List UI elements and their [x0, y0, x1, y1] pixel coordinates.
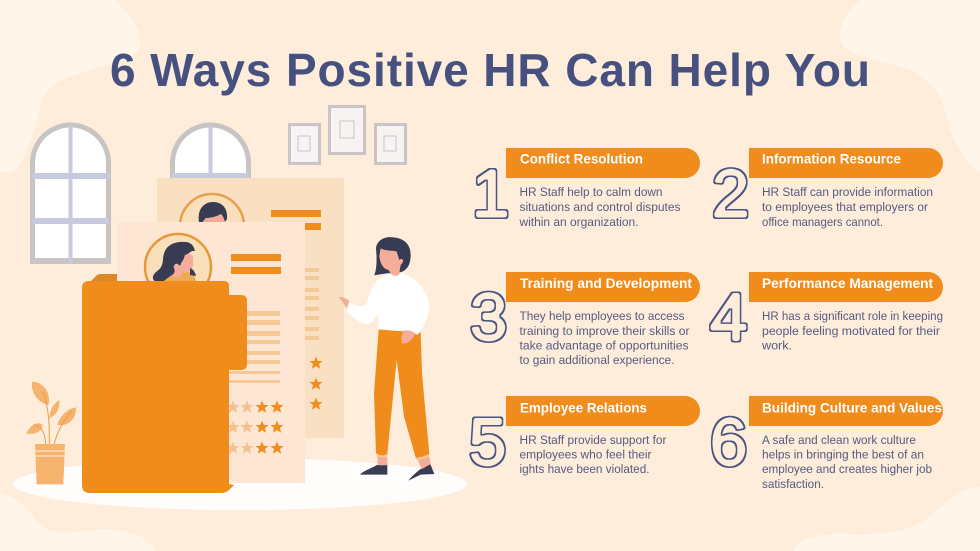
card 1: Conflict Resolution: within an organization.: [519, 215, 638, 229]
back resume: [157, 178, 344, 438]
illustration: office scene: [13, 106, 467, 510]
card 4: Performance Management: people feeling motivated for their: [762, 324, 940, 338]
card 5: Employee Relations: Employee Relations: [520, 400, 647, 416]
plant: [26, 382, 76, 484]
woman: [338, 237, 434, 481]
card 3: Training and Development: They help employees to access: [520, 309, 684, 323]
card 1: Conflict Resolution: Conflict Resolution: [520, 150, 643, 166]
card 3: Training and Development: take advantage of opportunities: [520, 338, 688, 352]
card 5: Employee Relations: 5: [469, 405, 506, 480]
card 6: Building Culture and Values: Building Culture and Values: [762, 400, 942, 416]
card 5: Employee Relations: ights have been violated.: [520, 462, 650, 476]
card 3: Training and Development: training to improve their skills or: [520, 324, 690, 338]
card 5: Employee Relations: employees who feel their: [520, 448, 652, 462]
card 4: Performance Management: 4: [710, 280, 747, 355]
card 1: Conflict Resolution: [472, 148, 700, 232]
folder: [82, 274, 247, 493]
card 6: Building Culture and Values: 6: [710, 405, 747, 480]
card 4: Performance Management: [710, 272, 943, 355]
card 1: Conflict Resolution: 1: [472, 156, 509, 232]
card 4: Performance Management: Performance Management: [762, 275, 933, 291]
card 2: Information Resource: 2: [712, 156, 749, 232]
card 4: Performance Management: HR has a significant role in keeping: [762, 309, 943, 323]
card 5: Employee Relations: [469, 396, 700, 480]
card 5: Employee Relations: HR Staff provide support for: [520, 433, 666, 447]
card 3: Training and Development: 3: [470, 280, 507, 355]
floor ellipse: [13, 458, 467, 510]
card 1: Conflict Resolution: HR Staff help to calm down: [520, 185, 662, 199]
card 3: Training and Development: [470, 272, 700, 367]
card 6: Building Culture and Values: [710, 396, 943, 491]
picture frames: [290, 106, 406, 164]
card 3: Training and Development: Training and Development: [520, 275, 692, 291]
title: 6 Ways Positive HR Can Help You: [110, 44, 870, 96]
card 1: Conflict Resolution: situations and control disputes: [520, 200, 680, 214]
card 6: Building Culture and Values: helps in bringing the best of an: [762, 448, 924, 462]
card 2: Information Resource: Information Resource: [762, 150, 901, 166]
card 6: Building Culture and Values: satisfaction.: [762, 477, 824, 491]
front resume: [144, 222, 305, 483]
card 3: Training and Development: to gain additional experience.: [520, 353, 674, 367]
card 2: Information Resource: to employees that employers or: [762, 200, 928, 214]
window left: [30, 123, 111, 264]
card 2: Information Resource: HR Staff can provide information: [762, 185, 933, 199]
card 6: Building Culture and Values: A safe and clean work culture: [762, 433, 916, 447]
window right: [170, 122, 251, 178]
card 2: Information Resource: [712, 148, 943, 232]
card 4: Performance Management: work.: [761, 338, 792, 352]
card 6: Building Culture and Values: employee and creates higher job: [762, 462, 932, 476]
card 2: Information Resource: office managers cannot.: [762, 215, 883, 229]
